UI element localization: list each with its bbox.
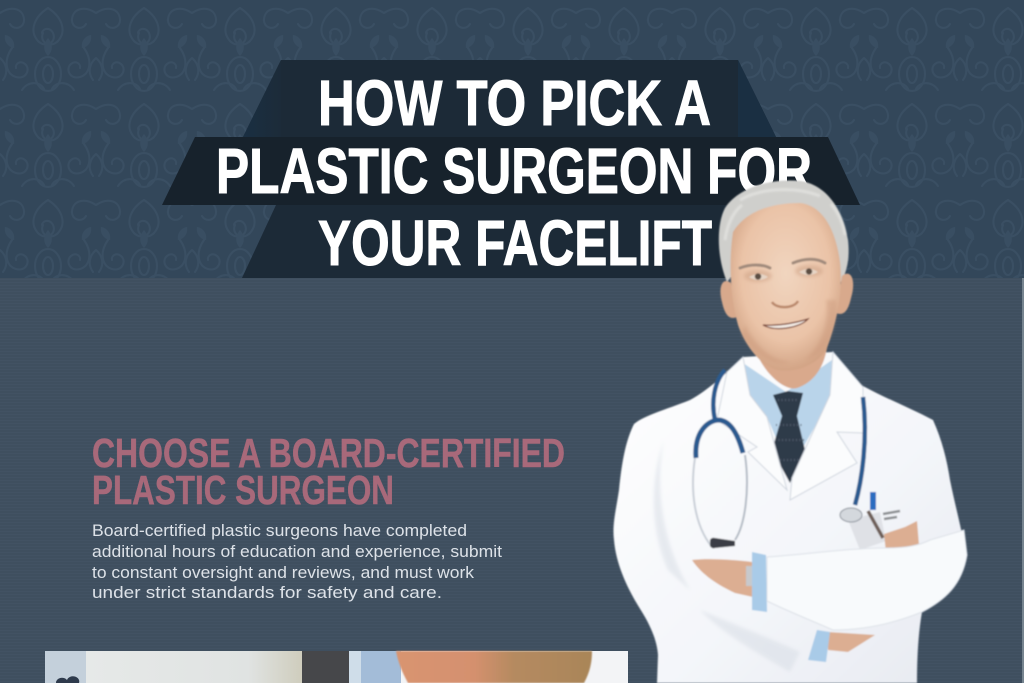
doctor portrait [613, 180, 967, 683]
head: eyes [749, 268, 818, 280]
head: hair [719, 180, 849, 282]
head: hair highlights [725, 190, 845, 240]
banner: bottom ribbon [242, 205, 800, 278]
head: nose shadow [772, 301, 798, 307]
head: ears [720, 274, 853, 318]
body text: Board-certified plastic surgeons have completed [92, 522, 467, 540]
head: cheek shading [742, 300, 836, 363]
body text [92, 522, 502, 602]
doctor: neck [752, 340, 828, 389]
doctor: pocket with pen and chestpiece [840, 492, 900, 550]
heading: choose a board-certified plastic surgeon [92, 430, 565, 513]
title banner [162, 60, 860, 279]
heading: choose a board-certified plastic surgeon: CHOOSE A BOARD-CERTIFIED [92, 430, 565, 476]
title text [216, 67, 812, 279]
doctor: coat body [613, 352, 966, 683]
background: damask pattern header [0, 0, 1024, 278]
banner: middle ribbon [162, 137, 860, 205]
doctor: crossed hands [692, 521, 919, 652]
title text: HOW TO PICK A [318, 67, 711, 139]
title text: YOUR FACELIFT [318, 207, 712, 279]
doctor: stethoscope earpiece [710, 538, 735, 548]
body text: under strict standards for safety and care. [92, 584, 442, 602]
doctor: coat shading [654, 440, 800, 672]
head: eyebrows [740, 259, 825, 268]
head: mouth [763, 319, 808, 329]
doctor: head [719, 180, 853, 371]
doctor: watch and shirt cuffs [746, 552, 830, 662]
doctor: coat lapels [717, 352, 863, 500]
banner: top ribbon [243, 60, 776, 137]
background: lower panel [0, 278, 1024, 683]
heading: choose a board-certified plastic surgeon: PLASTIC SURGEON [92, 467, 394, 513]
body text: additional hours of education and experience, submit [92, 543, 502, 561]
head: face [731, 203, 841, 371]
doctor: tie [772, 391, 805, 483]
body text: to constant oversight and reviews, and must work [92, 564, 475, 582]
photo strip at bottom [45, 651, 628, 683]
head: eye shadows [744, 265, 823, 282]
doctor: stethoscope tubes [693, 370, 865, 547]
title text: PLASTIC SURGEON FOR [216, 135, 812, 207]
doctor: folded forearm [767, 530, 967, 630]
doctor: shirt collar [743, 360, 832, 470]
